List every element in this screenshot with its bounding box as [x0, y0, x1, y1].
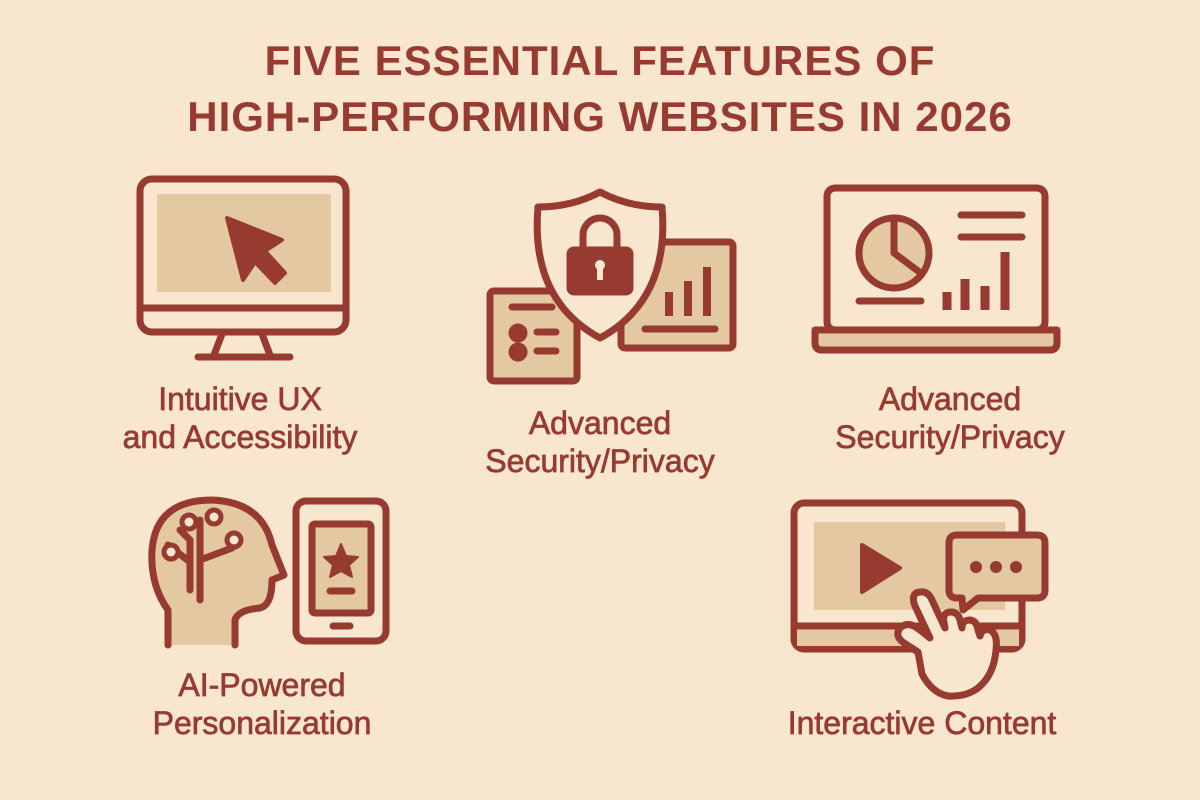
label: Intuitive UX: Intuitive UX [158, 381, 322, 417]
label: AI-Powered Personalization [153, 667, 371, 741]
label: Intuitive UX [123, 381, 358, 455]
label: Advanced Security center: Security/Privacy [485, 443, 715, 479]
icon: AI head and phone [152, 500, 386, 645]
title: HIGH-PERFORMING WEBSITES IN 2026 [187, 93, 1013, 140]
icon: monitor with cursor [140, 179, 346, 357]
label: Advanced Security right: Advanced [879, 381, 1021, 417]
label: Advanced Security right [835, 381, 1066, 455]
label: Advanced Security center: Advanced [529, 405, 671, 441]
label: Intuitive UX: and Accessibility [123, 419, 357, 455]
label: AI-Powered Personalization: Personalization [153, 705, 371, 741]
icon: security shield with panels [490, 192, 733, 381]
title: FIVE ESSENTIAL FEATURES OF [265, 37, 935, 84]
label: AI-Powered Personalization: AI-Powered [178, 667, 346, 703]
icon: video with hand and chat [794, 503, 1045, 696]
label: Interactive Content: Interactive Content [788, 705, 1056, 741]
title [187, 37, 1013, 140]
label: Advanced Security center [485, 405, 716, 479]
label: Advanced Security right: Security/Privacy [835, 419, 1065, 455]
icon: laptop with charts [815, 188, 1057, 350]
